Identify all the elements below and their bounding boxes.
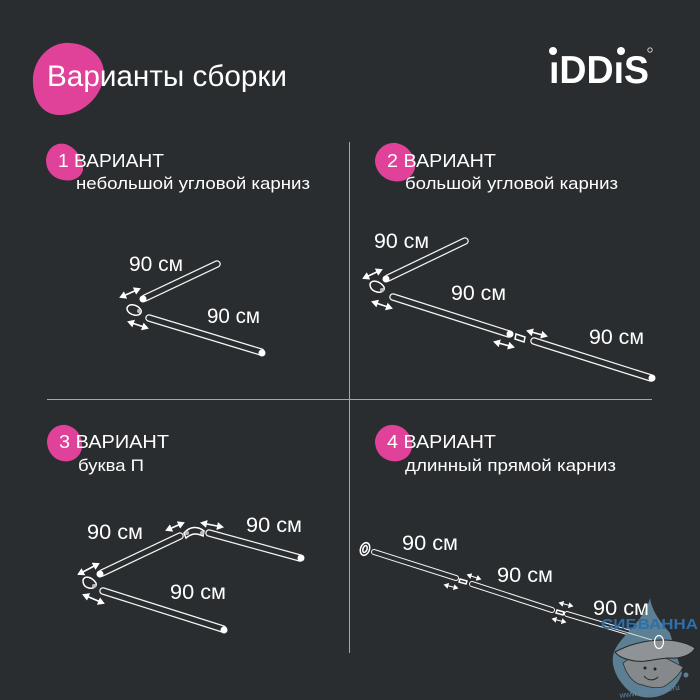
diagram 1: 90 см	[129, 252, 183, 276]
diagram 4: 90 см	[497, 563, 553, 587]
bath	[623, 655, 683, 688]
subtitle 3: буква П	[78, 456, 144, 475]
panel: variant 3	[47, 425, 304, 634]
badge 1	[46, 144, 83, 181]
diagram 2: 90 см	[374, 229, 429, 253]
diagram 3: 90 см	[170, 580, 226, 604]
watermark: drop mascot: www.sibvanna.ru	[618, 683, 680, 700]
diagram 4	[359, 531, 654, 640]
diagram 2: 90 см	[589, 325, 644, 349]
dividers	[47, 142, 652, 653]
title: Варианты сборки	[47, 60, 287, 93]
panel: variant 2	[364, 143, 656, 382]
diagram 2	[364, 229, 656, 382]
diagram 3: 90 см	[87, 520, 143, 544]
logo: IDDIS: ıDDıS	[549, 49, 649, 92]
subtitle 4: длинный прямой карниз	[405, 456, 616, 475]
subtitle 2: большой угловой карниз	[405, 174, 618, 193]
badge 4	[375, 425, 412, 461]
watermark label: 90 см	[593, 596, 649, 620]
diagram 1	[121, 252, 266, 356]
subtitle 1: небольшой угловой карниз	[76, 174, 310, 193]
badge 3	[47, 425, 82, 461]
title	[33, 43, 287, 115]
diagram 2: 90 см	[451, 281, 506, 305]
heading 4: 4 ВАРИАНТ	[387, 431, 496, 452]
diagram 3	[79, 513, 304, 634]
badge 2	[375, 143, 415, 181]
watermark: drop mascot	[593, 596, 698, 700]
diagram 1: 90 см	[207, 304, 260, 328]
panel: variant 4	[359, 425, 654, 640]
diagram 4: 90 см	[402, 531, 458, 555]
diagram 3: 90 см	[246, 513, 302, 537]
pipe over drop	[602, 625, 652, 640]
watermark: drop mascot: СИБВАННА	[601, 616, 698, 633]
heading 1: 1 ВАРИАНТ	[58, 150, 164, 171]
heading 2: 2 ВАРИАНТ	[387, 150, 496, 171]
panel: variant 1	[46, 144, 310, 356]
heading 3: 3 ВАРИАНТ	[59, 431, 169, 452]
